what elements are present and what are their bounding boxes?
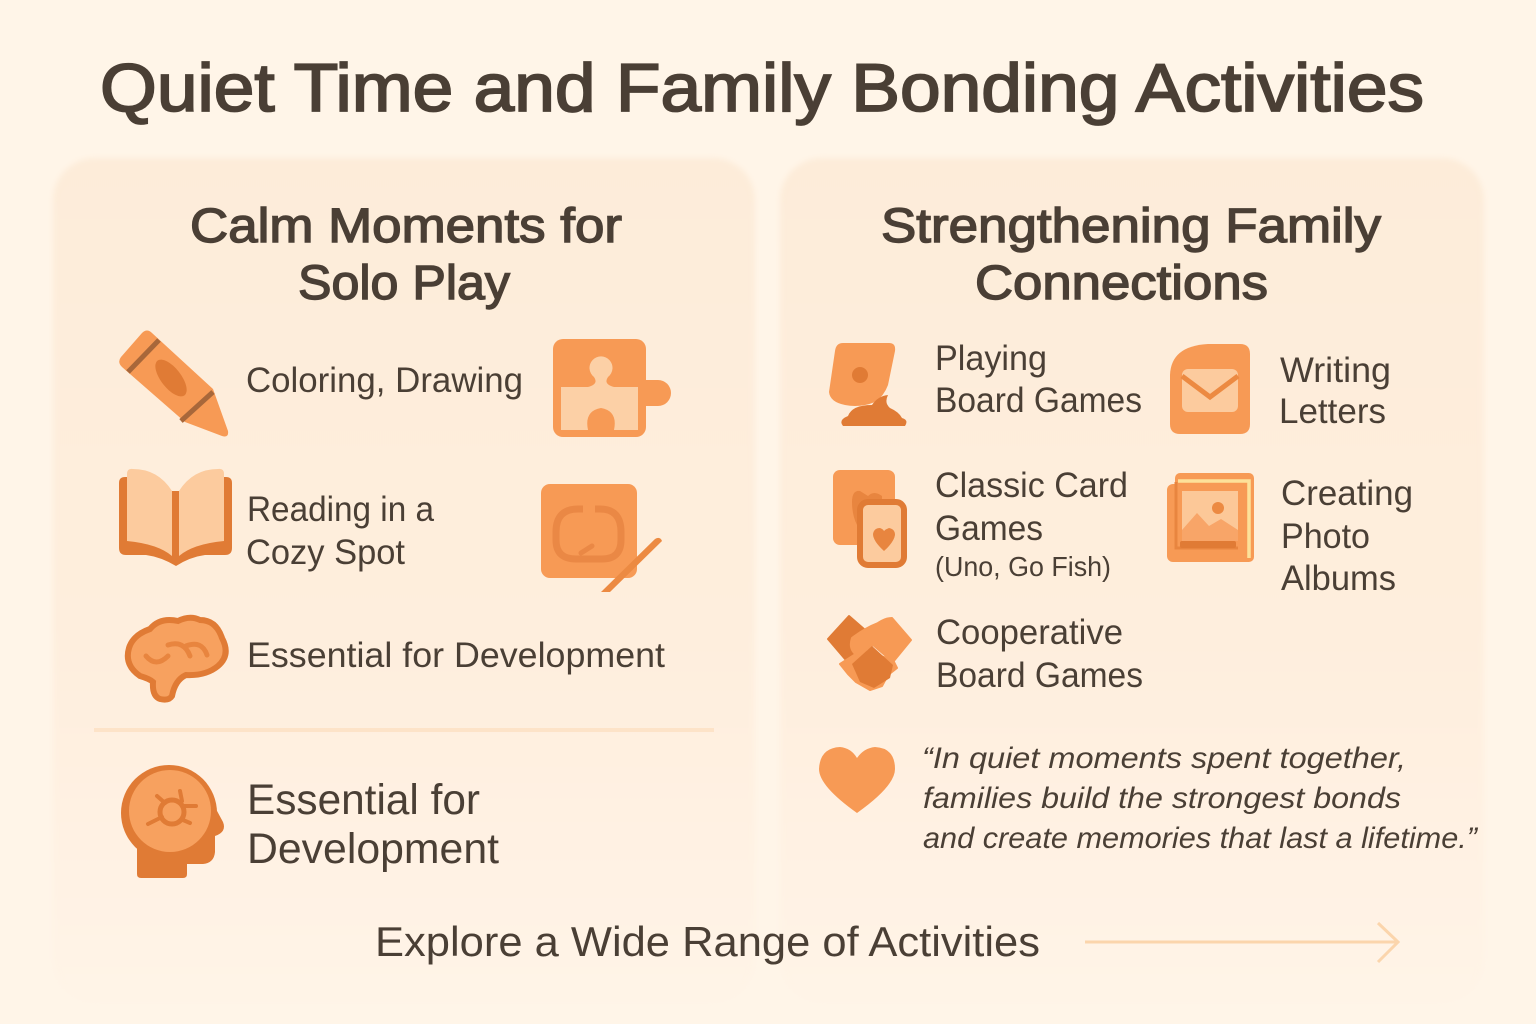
quote: “In quiet moments spent together, (922, 742, 1406, 775)
title: Quiet Time and Family Bonding Activities (100, 50, 1424, 126)
text: photo albums (1281, 474, 1413, 598)
text: card games: Games (935, 509, 1043, 548)
text: playing: Playing (935, 339, 1047, 378)
quote: and create memories that last a lifetime.” (923, 822, 1479, 855)
text: reading (246, 490, 434, 572)
text: essential large (247, 776, 499, 873)
icon: handshake (828, 616, 911, 690)
text: coloring: Coloring, Drawing (246, 361, 523, 400)
text: essential large: Essential for (247, 776, 480, 824)
heading: strengthening: Connections (975, 257, 1268, 310)
text: essential for development: Essential for Development (247, 636, 665, 675)
text: writing: Letters (1279, 392, 1386, 431)
heading: strengthening: Strengthening Family (881, 200, 1381, 253)
heading: calm moments (190, 200, 622, 310)
text: card games: (Uno, Go Fish) (935, 551, 1111, 582)
icon: book (119, 469, 232, 566)
text: reading: Reading in a (247, 490, 434, 529)
icon: tablet and stylus (541, 484, 662, 592)
arrow (1085, 923, 1398, 962)
heading: calm moments: Solo Play (298, 257, 510, 310)
text: card games: Classic Card (935, 466, 1128, 505)
panel background: family (780, 158, 1484, 1003)
text: cooperative: Cooperative (936, 613, 1123, 652)
text: photo albums: Creating (1281, 474, 1413, 513)
icon: board game (829, 343, 906, 426)
icon: brain (128, 618, 226, 700)
panel: family (780, 158, 1484, 1003)
text: photo albums: Albums (1281, 559, 1396, 598)
icon: crayon (119, 330, 228, 436)
text: playing (935, 339, 1142, 420)
text: photo albums: Photo (1281, 517, 1370, 556)
text: reading: Cozy Spot (246, 533, 405, 572)
text: cooperative: Board Games (936, 656, 1143, 695)
text: essential large: Development (247, 825, 499, 873)
panel background: solo play (53, 158, 755, 1003)
icon: heart (819, 747, 895, 813)
quote (922, 742, 1479, 855)
text: card games (935, 466, 1128, 582)
icon: head (121, 765, 224, 878)
text: writing: Writing (1280, 351, 1391, 390)
icon: envelope (1170, 344, 1250, 434)
text: cooperative (936, 613, 1143, 695)
panel: solo play (53, 158, 755, 1003)
icon: cards (833, 470, 904, 565)
quote: families build the strongest bonds (923, 782, 1401, 815)
text: writing (1279, 351, 1391, 431)
icon: puzzle (553, 339, 671, 437)
icon: photo album (1167, 473, 1254, 562)
footer text: Explore a Wide Range of Activities (375, 918, 1040, 965)
heading: strengthening (881, 200, 1381, 310)
heading: calm moments: Calm Moments for (190, 200, 622, 253)
text: playing: Board Games (935, 381, 1142, 420)
